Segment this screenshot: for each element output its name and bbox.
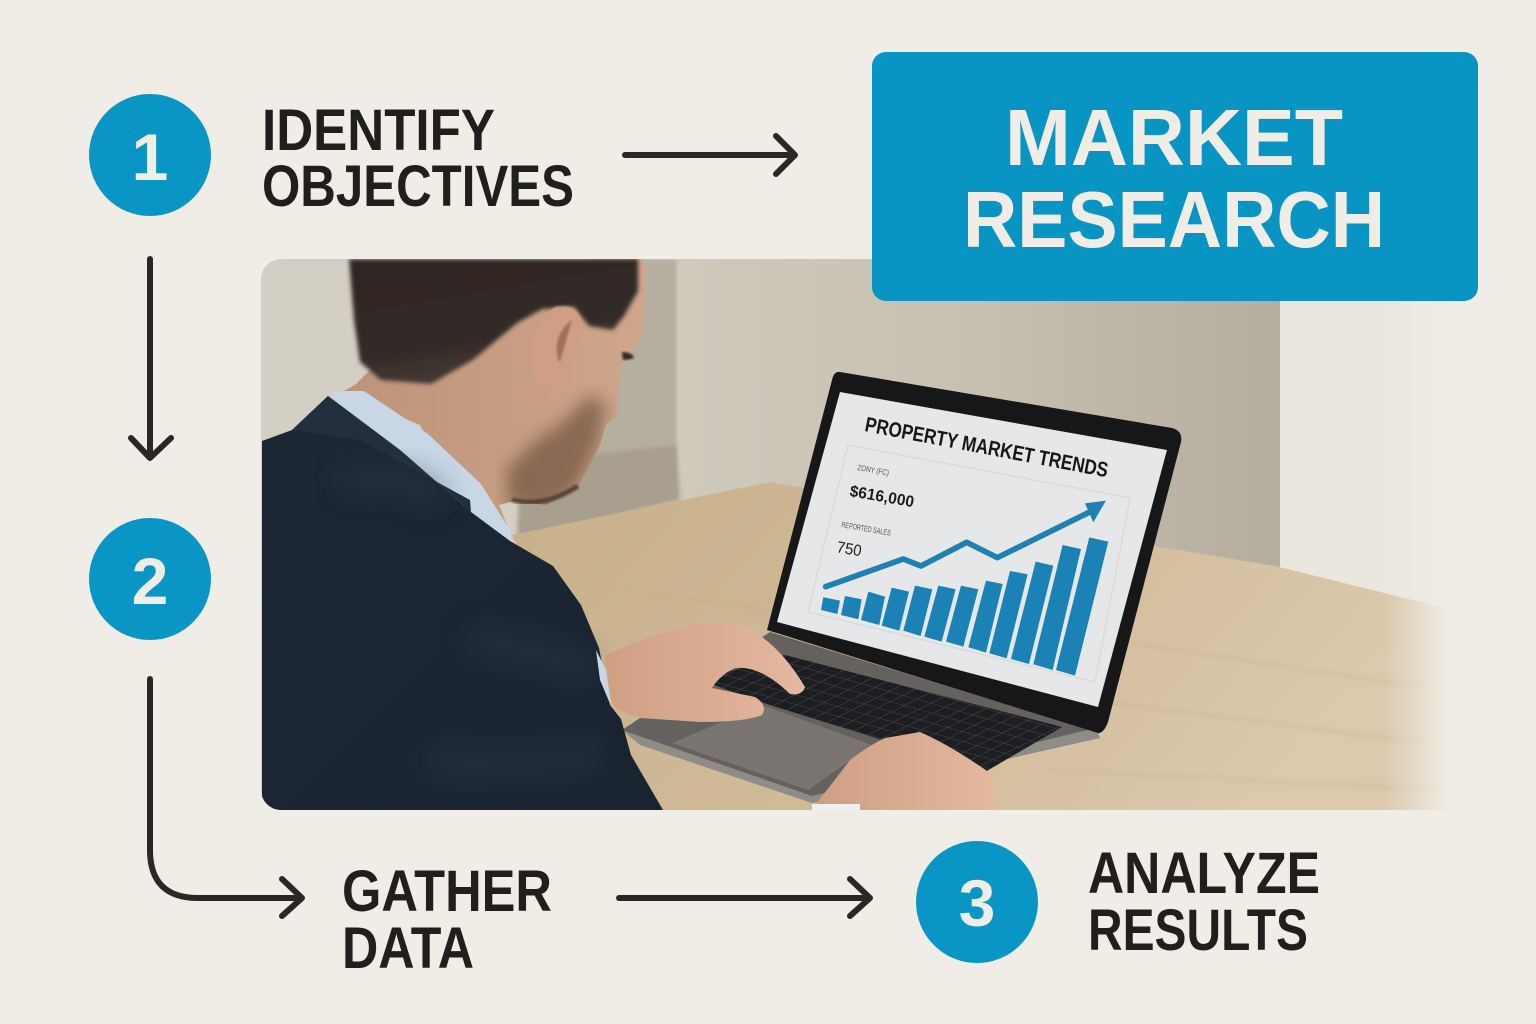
wood grain (620, 590, 1440, 790)
price figure: $616,000 (848, 483, 915, 511)
step 3 label: ANALYZE (1088, 841, 1320, 906)
neck and face (342, 259, 645, 535)
step 2 badge: 2 (132, 544, 168, 618)
laptop screen (777, 392, 1167, 707)
step 3 label (1088, 841, 1320, 963)
step 1 badge (89, 94, 211, 216)
right hand (815, 732, 998, 810)
arrow: step 2 to gather data (150, 679, 302, 916)
trackpad (672, 705, 872, 790)
arrow: objectives to market research (625, 136, 795, 174)
left hand (605, 623, 805, 722)
laptop (622, 372, 1181, 803)
arrow: step 1 to step 2 (131, 259, 171, 458)
suit jacket (262, 396, 663, 810)
jaw shadow (512, 486, 578, 502)
step 3 label: RESULTS (1088, 898, 1308, 963)
eye (622, 352, 634, 360)
shirt collar (330, 391, 512, 541)
step 3 badge: 3 (959, 866, 995, 940)
right edge cover (1450, 610, 1461, 808)
step 2 label (342, 859, 552, 981)
keyboard (700, 655, 1062, 772)
small label: ZONY (FC) (857, 463, 890, 478)
title panel: RESEARCH (963, 175, 1385, 264)
hair (349, 259, 638, 384)
shirt cuff (596, 650, 611, 706)
step 2 badge (89, 518, 211, 640)
photo: analyst at laptop (261, 259, 1462, 810)
office wall background (261, 259, 1280, 810)
small label: REPORTED SALES (841, 520, 891, 538)
step 2 label: DATA (342, 916, 474, 981)
trend arrow (826, 501, 1106, 587)
step 1 label: OBJECTIVES (262, 154, 574, 219)
title panel (872, 52, 1478, 301)
step 1 badge: 1 (132, 120, 168, 194)
arrow: gather data to step 3 (619, 879, 870, 916)
screen title: PROPERTY MARKET TRENDS (863, 413, 1110, 482)
lapel fold (292, 396, 471, 512)
laptop lid (767, 372, 1181, 733)
count figure: 750 (835, 539, 863, 560)
ear (549, 304, 582, 321)
laptop base (622, 632, 1100, 803)
step 1 label (262, 98, 574, 219)
bar chart (821, 537, 1108, 676)
right edge fade (1394, 596, 1451, 810)
title text: MARKET (1005, 93, 1343, 182)
step 2 label: GATHER (342, 859, 552, 924)
step 1 label: IDENTIFY (262, 98, 495, 163)
wooden table (512, 482, 1461, 810)
beard stubble (506, 395, 606, 510)
jacket highlights (403, 452, 607, 764)
man (262, 259, 998, 810)
chart panel outline (808, 445, 1130, 682)
right shirt cuff (812, 804, 860, 810)
step 3 badge (916, 841, 1038, 963)
